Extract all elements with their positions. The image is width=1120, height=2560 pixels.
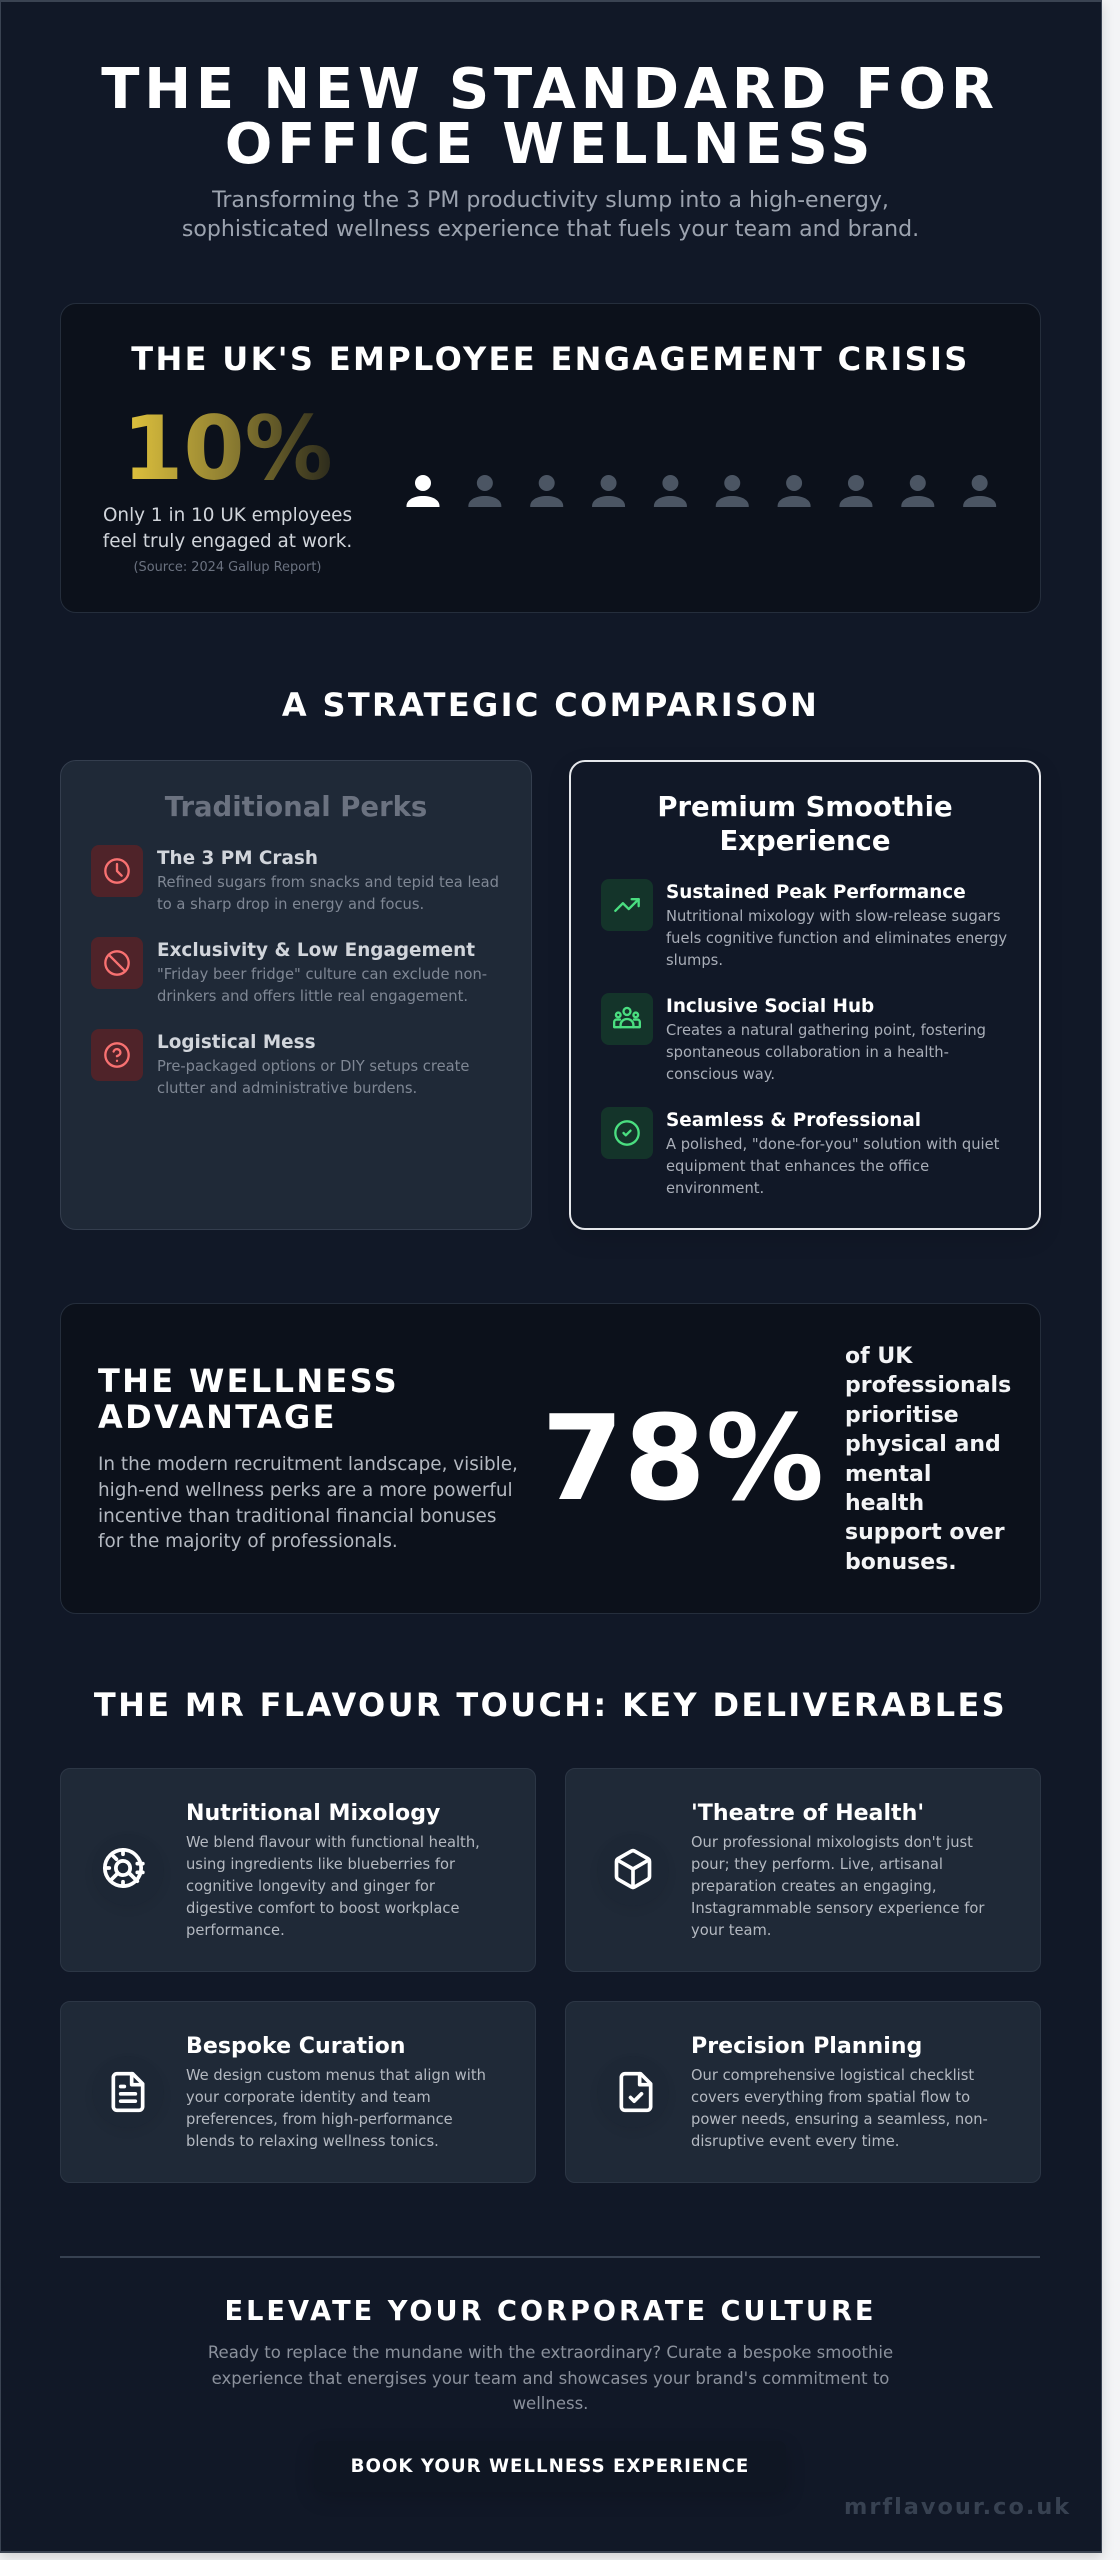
item: the 3 pm crash: [157, 848, 499, 913]
text: precision planning: disruptive event every time.: [691, 2133, 899, 2150]
text: theatre of health: 'Theatre of Health': [691, 1800, 924, 1826]
icon: question: [91, 1029, 143, 1081]
panel: traditional perks: "Friday beer fridge" culture can exclude non-: [157, 966, 487, 983]
card: bespoke curation: [60, 2001, 536, 2183]
text: theatre of health: Instagrammable sensory experience for: [691, 1900, 984, 1917]
panel: traditional perks: drinkers and offers little real engagement.: [157, 988, 468, 1005]
text: precision planning: Our comprehensive logistical checklist: [691, 2067, 974, 2084]
panel: traditional perks: clutter and administrative burdens.: [157, 1080, 417, 1097]
text: 78 percent description: professionals: [845, 1373, 1011, 1398]
subtitle: Transforming the 3 PM productivity slump into a high-energy,: [212, 188, 889, 213]
panel: premium smoothie experience: slumps.: [666, 952, 723, 969]
button: book your wellness experience: BOOK YOUR WELLNESS EXPERIENCE: [351, 2456, 749, 2477]
panel: premium smoothie experience: [569, 760, 1041, 1230]
panel: wellness advantage: [60, 1303, 1041, 1614]
icon: theatre of health cube: [614, 1848, 652, 1890]
panel: premium smoothie experience: Creates a natural gathering point, fostering: [666, 1022, 986, 1039]
text: 78 percent description: support over: [845, 1520, 1005, 1545]
subtitle: sophisticated wellness experience that fuels your team and brand.: [182, 217, 919, 242]
panel: traditional perks: [60, 760, 532, 1230]
panel: premium smoothie experience: spontaneous collaboration in a health-: [666, 1044, 949, 1061]
heading: traditional perks: Traditional Perks: [165, 791, 427, 823]
text: 78 percent description: physical and: [845, 1432, 1001, 1457]
card: precision planning: [565, 2001, 1041, 2183]
panel: traditional perks: Pre-packaged options or DIY setups create: [157, 1058, 469, 1075]
icon: precision planning checklist: [620, 2072, 652, 2112]
panel: premium smoothie experience: Sustained Peak Performance: [666, 882, 966, 903]
heading: premium smoothie experience: Premium Smoothie: [657, 791, 953, 823]
panel: traditional perks: The 3 PM Crash: [157, 848, 318, 869]
text: theatre of health: pour; they perform. Live, artisanal: [691, 1856, 943, 1873]
heading: wellness advantage: ADVANTAGE: [98, 1398, 337, 1436]
panel: premium smoothie experience: conscious way.: [666, 1066, 775, 1083]
text: call to action: [208, 2343, 893, 2413]
card: theatre of health: [565, 1768, 1041, 1972]
text: precision planning: power needs, ensuring a seamless, non-: [691, 2111, 988, 2128]
panel: traditional perks: Exclusivity & Low Engagement: [157, 940, 475, 961]
item: inclusive social hub: [666, 996, 986, 1083]
text: bespoke curation: Bespoke Curation: [186, 2033, 406, 2059]
text: wellness advantage body: [98, 1454, 518, 1552]
text: engagement statistic: feel truly engaged at work.: [103, 531, 352, 552]
text: nutritional mixology: digestive comfort to boost workplace: [186, 1900, 460, 1917]
text: bespoke curation: preferences, from high-performance: [186, 2111, 453, 2128]
panel: premium smoothie experience: A polished, "done-for-you" solution with quiet: [666, 1136, 999, 1153]
text: theatre of health: preparation creates an engaging,: [691, 1878, 937, 1895]
text: precision planning: covers everything from spatial flow to: [691, 2089, 970, 2106]
icon: nutritional mixology: [103, 1848, 145, 1888]
panel: traditional perks: to a sharp drop in energy and focus.: [157, 896, 424, 913]
text: bespoke curation: your corporate identity and team: [186, 2089, 431, 2106]
panel: engagement crisis: [60, 303, 1041, 613]
panel: premium smoothie experience: environment.: [666, 1180, 764, 1197]
text: bespoke curation: We design custom menus that align with: [186, 2067, 486, 2084]
panel: premium smoothie experience: Seamless & Professional: [666, 1110, 921, 1131]
item: sustained peak performance: [666, 882, 1007, 969]
subtitle: [182, 188, 919, 242]
text: wellness advantage body: high-end wellness perks are a more powerful: [98, 1480, 513, 1501]
icon: group: [600, 993, 652, 1045]
watermark: mrflavour.co.uk: [844, 2494, 1071, 2520]
text: 78 percent description: prioritise: [845, 1403, 959, 1428]
stat: 10 percent: 10%: [122, 397, 333, 500]
text: bespoke curation: blends to relaxing wellness tonics.: [186, 2133, 439, 2150]
text: 78 percent description: bonuses.: [845, 1550, 957, 1575]
heading: premium smoothie experience: [657, 791, 953, 857]
text: nutritional mixology: Nutritional Mixology: [186, 1800, 440, 1826]
panel: premium smoothie experience: equipment that enhances the office: [666, 1158, 929, 1175]
text: theatre of health: Our professional mixologists don't just: [691, 1834, 973, 1851]
text: nutritional mixology: cognitive longevity and ginger for: [186, 1878, 435, 1895]
panel: premium smoothie experience: Nutritional mixology with slow-release sugars: [666, 908, 1000, 925]
icon: trending up: [600, 879, 652, 931]
heading: wellness advantage: [98, 1362, 399, 1436]
text: 78 percent description: health: [845, 1491, 924, 1516]
text: 78 percent description: mental: [845, 1462, 931, 1487]
text: engagement statistic: [103, 505, 352, 552]
panel: traditional perks: Refined sugars from snacks and tepid tea lead: [157, 874, 499, 891]
heading: strategic comparison: A STRATEGIC COMPARISON: [282, 686, 819, 724]
title: THE NEW STANDARD FOR: [101, 56, 999, 122]
text: nutritional mixology: performance.: [186, 1922, 285, 1939]
text: wellness advantage body: for the majority of professionals.: [98, 1531, 398, 1552]
chart: 1 in 10 people pictogram: [406, 475, 996, 507]
panel: traditional perks: Logistical Mess: [157, 1032, 316, 1053]
heading: key deliverables: THE MR FLAVOUR TOUCH: KEY DELIVERABLES: [94, 1686, 1007, 1724]
panel: premium smoothie experience: Inclusive Social Hub: [666, 996, 874, 1017]
text: nutritional mixology: We blend flavour with functional health,: [186, 1834, 480, 1851]
button: book your wellness experience: [314, 2441, 786, 2492]
text: nutritional mixology: [186, 1800, 480, 1939]
heading: engagement crisis: THE UK'S EMPLOYEE ENGAGEMENT CRISIS: [131, 340, 970, 378]
stat: 78 percent: 78%: [542, 1389, 824, 1527]
text: call to action: Ready to replace the mundane with the extraordinary? Curate a bespoke smoothie: [208, 2343, 893, 2362]
text: precision planning: Precision Planning: [691, 2033, 922, 2059]
icon: check circle: [600, 1107, 652, 1159]
title: [101, 56, 999, 177]
icon: clock: [91, 845, 143, 897]
text: theatre of health: [691, 1800, 984, 1939]
heading: premium smoothie experience: Experience: [719, 825, 891, 857]
item: logistical mess: [157, 1032, 469, 1097]
text: source: (Source: 2024 Gallup Report): [134, 560, 321, 575]
text: wellness advantage body: incentive than traditional financial bonuses: [98, 1506, 496, 1527]
text: 78 percent description: of UK: [845, 1344, 912, 1369]
text: engagement statistic: Only 1 in 10 UK employees: [103, 505, 352, 526]
panel: premium smoothie experience: fuels cognitive function and eliminates energy: [666, 930, 1007, 947]
text: theatre of health: your team.: [691, 1922, 771, 1939]
text: wellness advantage body: In the modern recruitment landscape, visible,: [98, 1454, 518, 1475]
icon: ban: [91, 937, 143, 989]
item: seamless and professional: [666, 1110, 1000, 1197]
text: nutritional mixology: using ingredients like blueberries for: [186, 1856, 455, 1873]
icon: bespoke curation document: [112, 2072, 144, 2112]
text: precision planning: [691, 2033, 988, 2150]
title: OFFICE WELLNESS: [225, 112, 875, 177]
item: exclusivity: [157, 940, 487, 1005]
text: 78 percent description: [845, 1344, 1011, 1575]
text: call to action: wellness.: [513, 2394, 588, 2413]
heading: call to action: ELEVATE YOUR CORPORATE CULTURE: [225, 2296, 876, 2326]
card: nutritional mixology: [60, 1768, 536, 1972]
text: bespoke curation: [186, 2033, 486, 2150]
heading: wellness advantage: THE WELLNESS: [98, 1362, 399, 1400]
text: call to action: experience that energises your team and showcases your brand's commitment to: [212, 2369, 889, 2388]
